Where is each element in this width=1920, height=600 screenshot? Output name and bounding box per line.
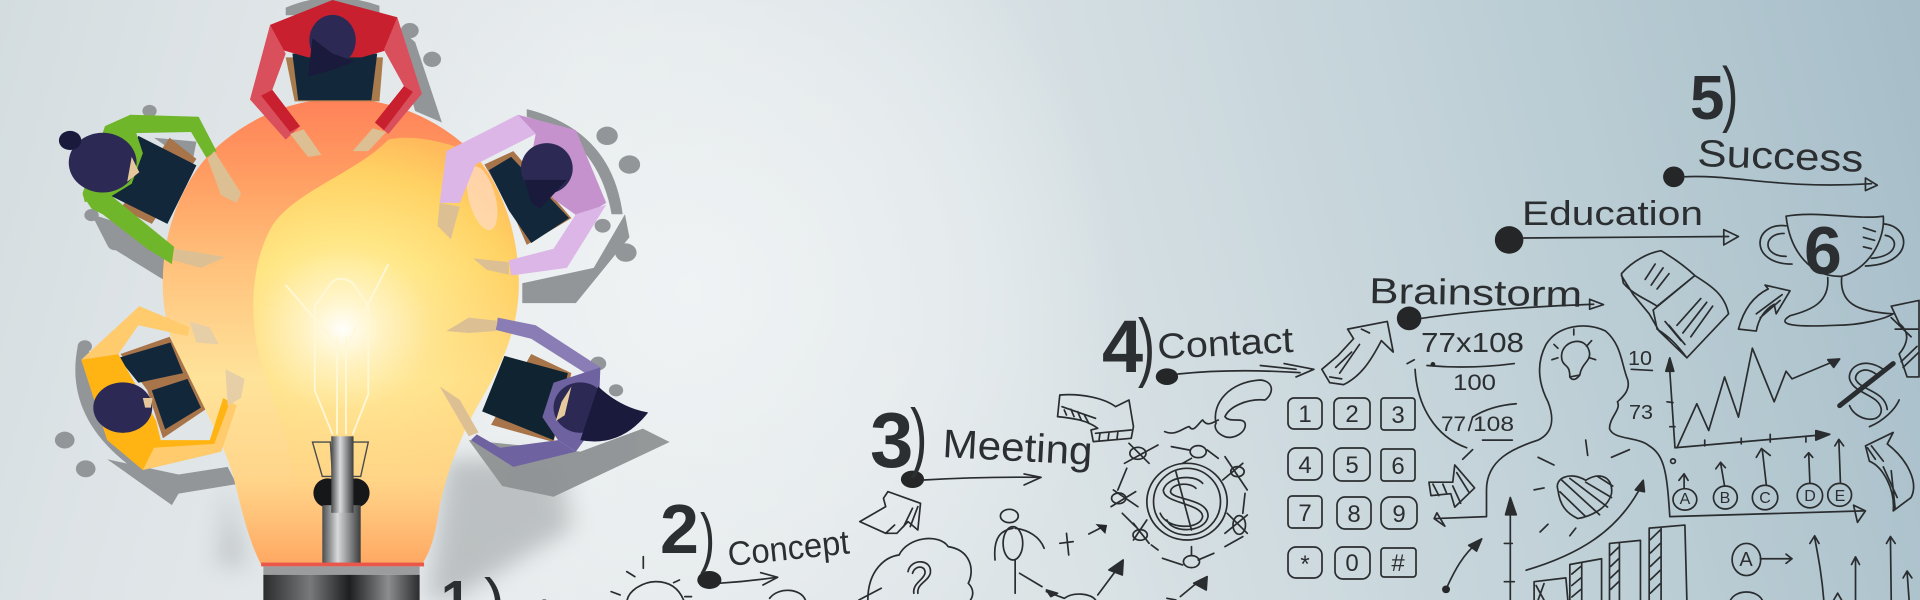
step 5 number: )	[1722, 54, 1738, 134]
icon: up-right arrow	[1322, 321, 1393, 385]
doodles: upper right	[1260, 166, 1919, 600]
icon: heart	[1557, 476, 1613, 519]
step 4 number: )	[1138, 303, 1155, 388]
circled letter arrows	[1673, 439, 1852, 510]
math notes: 100	[1453, 370, 1496, 395]
icon: stick figure	[995, 509, 1044, 593]
arrow: brainstorm	[1397, 299, 1604, 330]
person: orange	[81, 306, 245, 470]
keypad: 2	[1345, 401, 1359, 428]
trophy number 6: 6	[1804, 213, 1842, 289]
arrow: education	[1495, 226, 1738, 254]
keypad: 6	[1391, 453, 1405, 480]
arrow: success	[1663, 166, 1877, 191]
label: Meeting: Meeting	[942, 422, 1094, 474]
keypad: 1	[1298, 401, 1312, 428]
keypad: 3	[1391, 402, 1405, 429]
circled letters: D	[1804, 488, 1816, 505]
circled letters	[1680, 488, 1845, 571]
chair shadows	[55, 0, 670, 505]
filament glow	[254, 249, 432, 409]
bar chart	[1442, 480, 1687, 600]
circled letters: C	[1759, 490, 1771, 507]
step 2 number: 2	[660, 490, 699, 568]
label: Brainstorm: Brainstorm	[1369, 270, 1583, 315]
keypad	[1288, 398, 1417, 579]
circled letters: E	[1835, 488, 1845, 505]
keypad: 9	[1392, 501, 1406, 528]
step 5 number	[1690, 54, 1738, 134]
icon: book	[1621, 251, 1729, 358]
label: Education: Education	[1522, 195, 1703, 233]
icon: curved arrow	[1058, 395, 1133, 442]
icon: trophy arrow	[1738, 285, 1790, 331]
keypad: 0	[1345, 550, 1359, 577]
arrow: concept	[697, 571, 805, 600]
icon: right curved arrow	[1891, 300, 1919, 377]
icon: striped left arrow	[1429, 465, 1475, 507]
keypad: #	[1391, 550, 1405, 577]
math notes	[1421, 327, 1653, 436]
person: light purple	[437, 115, 606, 276]
icon: small light bulb	[611, 557, 692, 600]
icon: big curved arrow	[1865, 432, 1914, 511]
math notes: 10	[1628, 348, 1652, 370]
step 2 number	[660, 490, 715, 574]
arrow: contact	[1156, 368, 1300, 385]
filament	[286, 264, 388, 434]
bulb glass	[163, 99, 519, 564]
icon: crossed dollar	[1840, 363, 1899, 427]
math notes: 77x108	[1421, 327, 1524, 358]
keypad: 4	[1298, 452, 1312, 479]
icon: question cloud	[859, 539, 973, 600]
plus and arrows	[1046, 524, 1207, 600]
math notes: 108	[1473, 413, 1514, 436]
arrow: meeting	[901, 471, 1041, 488]
illustration: light bulb with team around table	[55, 0, 670, 600]
icon: up arrow	[860, 492, 921, 533]
step 5 number: 5	[1690, 64, 1724, 133]
person: red top	[250, 0, 422, 157]
person: violet	[440, 318, 648, 467]
icon: head bulb	[1552, 329, 1596, 379]
lower right arrows	[1731, 536, 1912, 600]
bulb pale reflection	[461, 164, 503, 232]
step 3 number: 3	[870, 396, 913, 484]
doodles: lower middle	[611, 368, 1300, 600]
step 3 number: )	[910, 393, 927, 478]
step 1 label	[441, 567, 596, 600]
socket	[261, 436, 424, 600]
step 2 number: )	[700, 500, 715, 574]
icon: phone	[1165, 380, 1271, 437]
human head silhouette	[1434, 326, 1865, 536]
label: Concept: Concept	[726, 523, 852, 574]
keypad: *	[1300, 551, 1310, 578]
bulb inner highlight	[253, 138, 519, 476]
keypad: 5	[1345, 452, 1359, 479]
line chart	[1631, 348, 1840, 463]
keypad: 7	[1298, 500, 1312, 527]
step 4 number: 4	[1102, 305, 1143, 388]
keypad: 8	[1347, 501, 1361, 528]
circled letters: A	[1739, 549, 1753, 571]
bulb cast shadow	[221, 459, 571, 600]
math notes: 73	[1629, 402, 1653, 424]
icon: trophy	[1760, 214, 1904, 326]
math notes: 77	[1441, 413, 1466, 436]
label: Contact: Contact	[1156, 319, 1294, 367]
circled letters: B	[1720, 490, 1730, 507]
icon: dollar network	[1111, 443, 1247, 568]
math bracket	[1427, 364, 1514, 367]
label: Success: Success	[1697, 133, 1864, 181]
circled letters: A	[1680, 491, 1691, 508]
person: green	[59, 115, 241, 268]
arrowhead: contact	[1260, 364, 1314, 377]
